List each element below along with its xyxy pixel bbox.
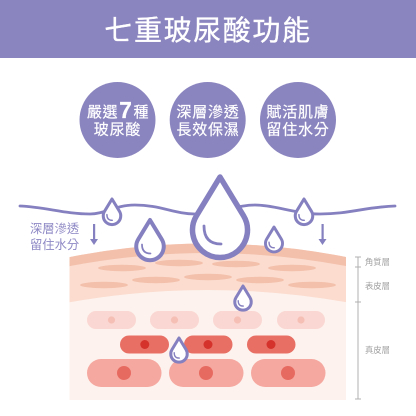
drop: wave left xyxy=(103,199,121,225)
title: 七重玻尿酸功能 xyxy=(104,15,312,46)
badge: revitalise skin xyxy=(260,82,336,158)
caption: deep penetration: 留住水分 xyxy=(30,238,79,252)
skin cross-section xyxy=(60,244,356,400)
layer labels xyxy=(365,257,390,355)
drop: in epidermis xyxy=(235,286,251,310)
caption: deep penetration: 深層滲透 xyxy=(30,222,79,236)
epidermis cells xyxy=(80,260,336,288)
stratum corneum layer xyxy=(70,244,346,266)
layer bracket xyxy=(355,257,361,399)
drop: large left xyxy=(136,220,164,260)
dermis cells top row xyxy=(87,311,325,329)
badge: revitalise skin: 賦活肌膚 xyxy=(266,104,330,121)
dermis cells middle row xyxy=(120,336,296,354)
layer labels: 真皮層 xyxy=(365,345,390,355)
drop: main centre xyxy=(192,177,248,257)
drop: right small xyxy=(265,227,283,252)
badge: select 7 hyaluronic acids: 玻尿酸 xyxy=(94,122,141,138)
badge: select 7 hyaluronic acids: 嚴選 xyxy=(87,104,118,121)
badge: deep penetration: 長效保濕 xyxy=(176,122,240,138)
badge: select 7 hyaluronic acids: 7 xyxy=(119,97,132,123)
arrow: left down xyxy=(90,224,98,245)
drop: wave right xyxy=(295,199,313,225)
dermis layer xyxy=(70,285,346,400)
water surface wave xyxy=(20,205,395,214)
layer labels: 角質層 xyxy=(365,257,390,267)
badge: revitalise skin: 留住水分 xyxy=(266,122,330,138)
dermis cells bottom row xyxy=(87,359,326,387)
layer labels: 表皮層 xyxy=(365,281,390,291)
badge: deep penetration xyxy=(170,82,246,158)
drop: in dermis xyxy=(171,338,187,362)
arrow: right down xyxy=(318,224,326,245)
caption: deep penetration xyxy=(30,222,79,252)
badge: select 7 hyaluronic acids: 種 xyxy=(134,104,149,121)
badge: deep penetration: 深層滲透 xyxy=(176,104,240,121)
title banner xyxy=(0,0,416,58)
badge: select 7 hyaluronic acids xyxy=(80,82,156,158)
epidermis layer xyxy=(60,244,356,304)
